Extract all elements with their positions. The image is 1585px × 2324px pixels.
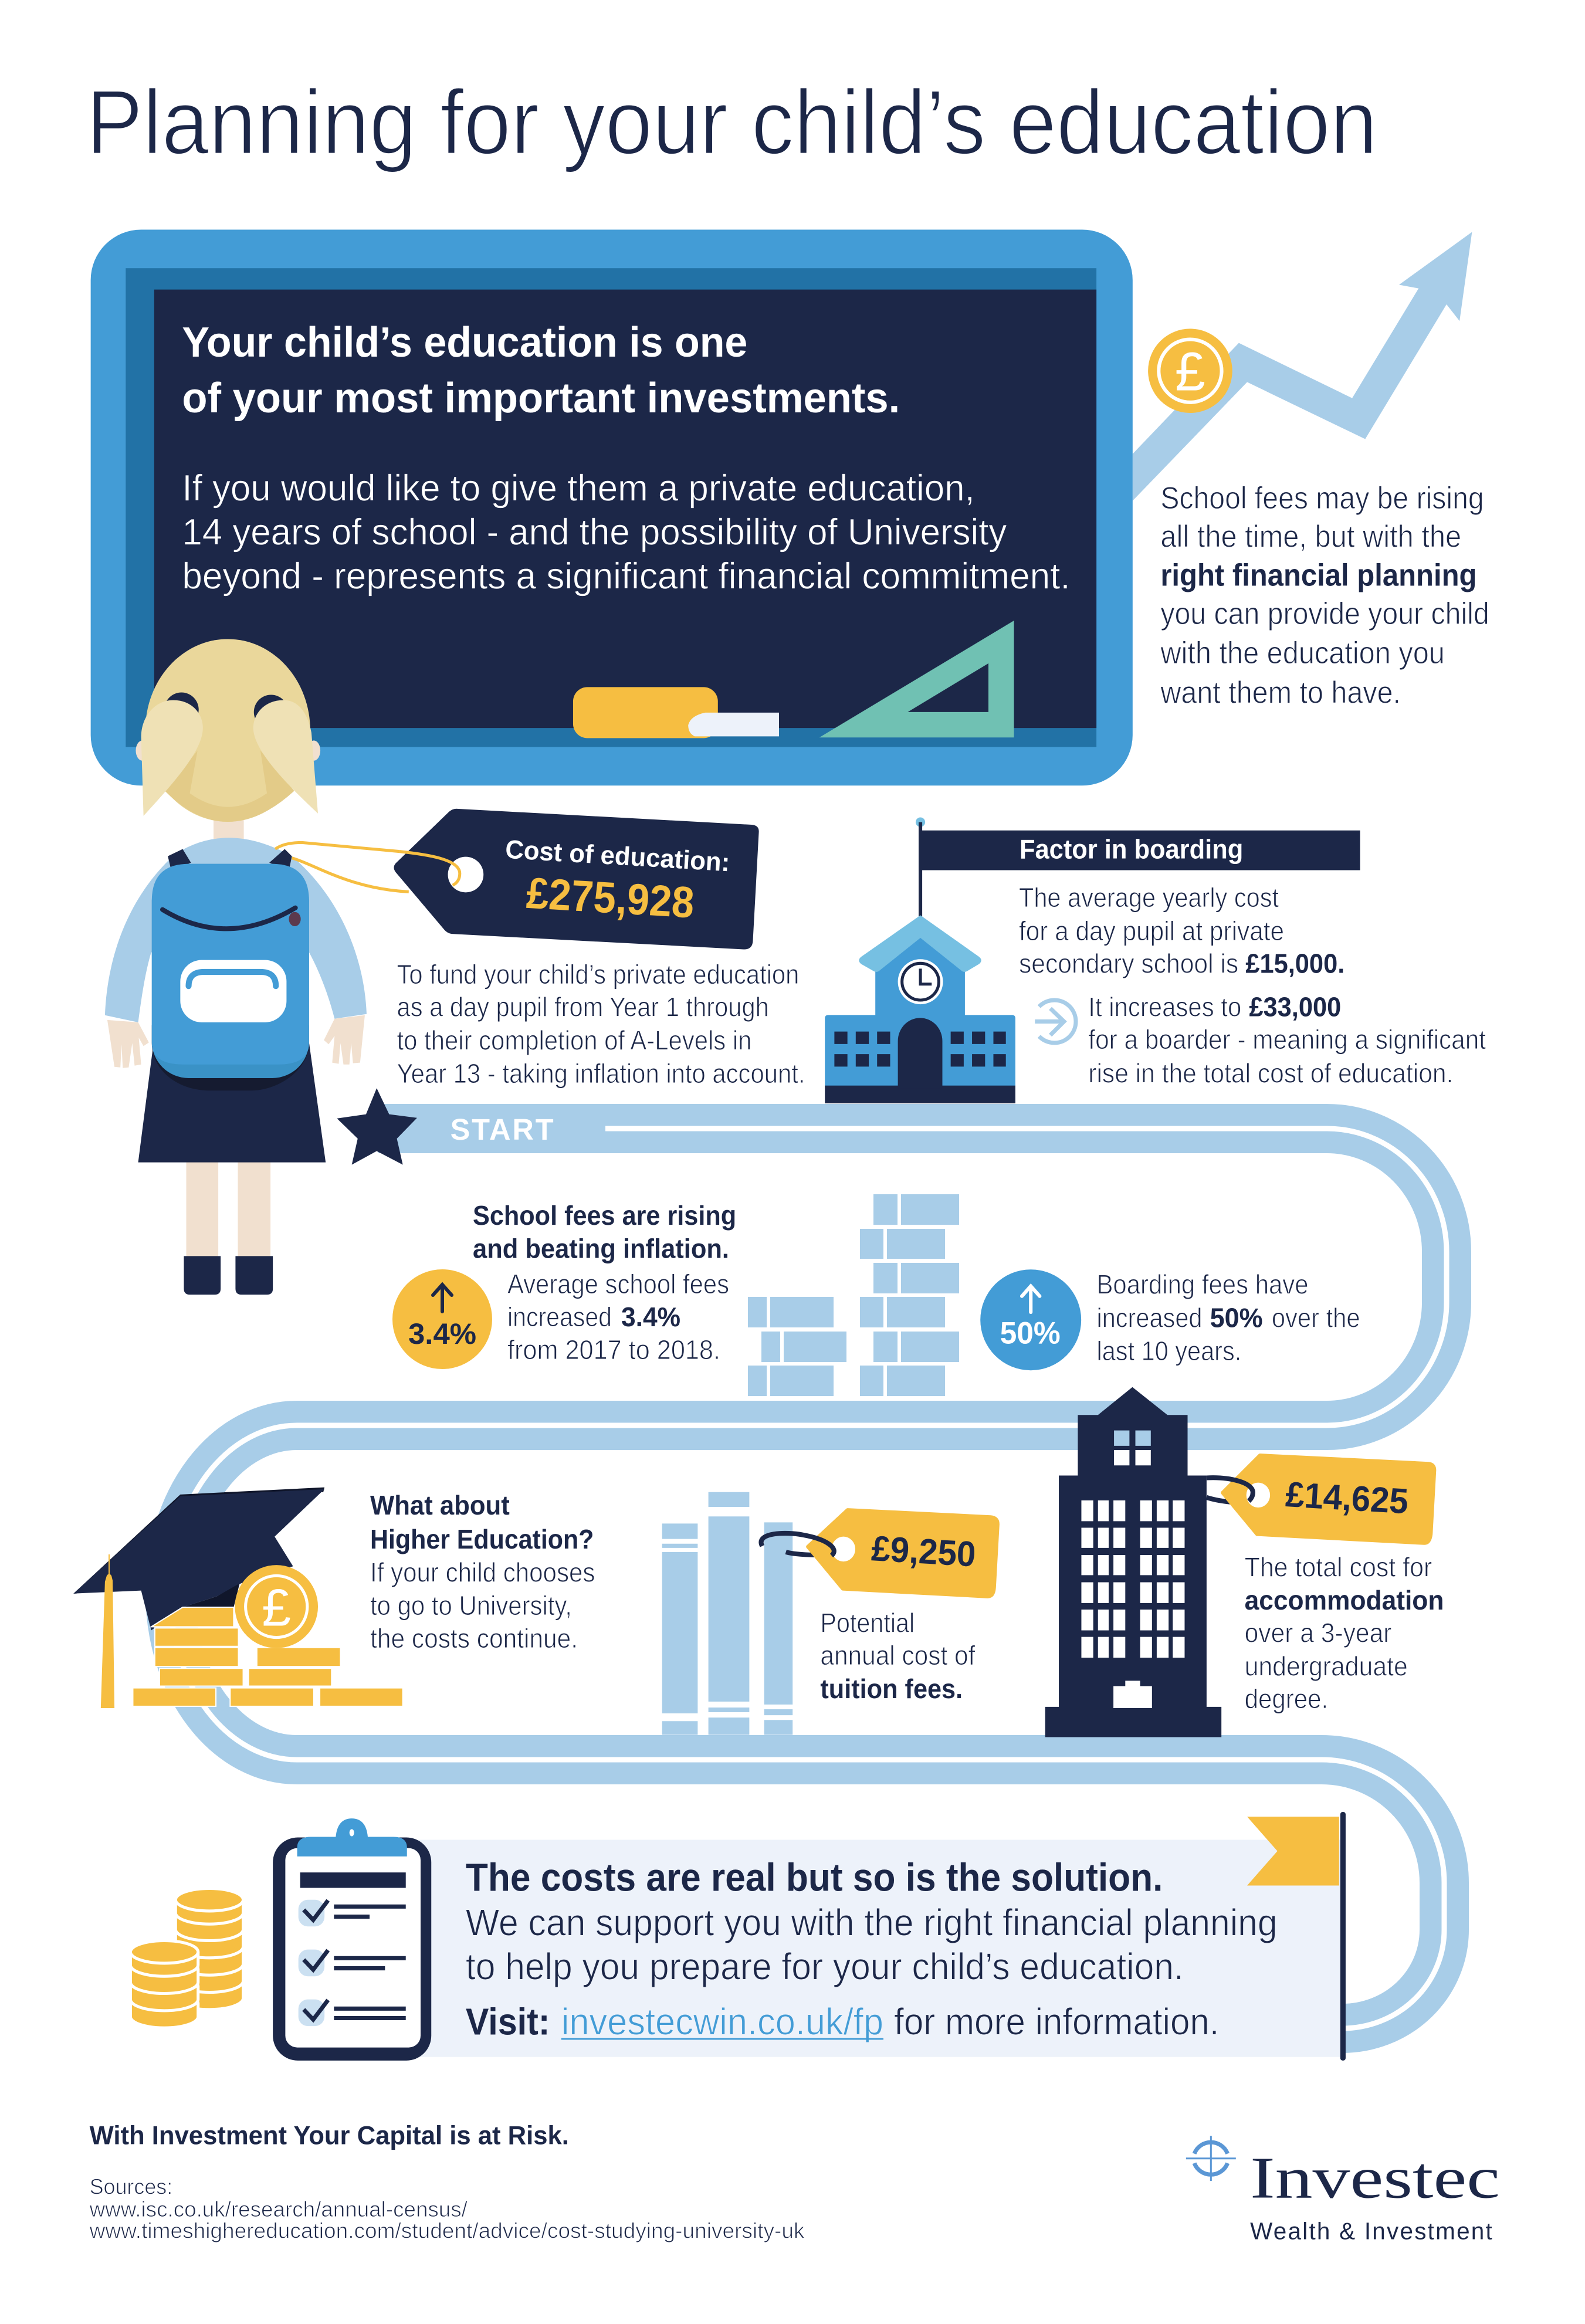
illustration: graduation cap and gold — [73, 1488, 403, 1708]
winding road — [170, 1129, 1447, 2028]
price tag: tuition fees — [761, 1510, 998, 1597]
right intro text: want them to have. — [1160, 676, 1401, 710]
price tag: accommodation: £14,625 — [1285, 1474, 1410, 1521]
board body text: beyond - represents a significant financial commitment. — [182, 555, 1071, 597]
stat: 50 percent — [980, 1269, 1081, 1370]
board body text: If you would like to give them a private education, — [182, 468, 975, 509]
sources — [89, 2174, 805, 2242]
icon: start star — [337, 1088, 417, 1165]
icon: board eraser — [573, 687, 718, 738]
text: higher education: the costs continue. — [370, 1623, 578, 1654]
text: boarding fees: Boarding fees have — [1096, 1269, 1309, 1300]
text: boarder cost: rise in the total cost of education. — [1088, 1058, 1453, 1089]
heading: school fees rising: School fees are rising — [473, 1200, 736, 1231]
icon: finish flag — [1247, 1812, 1346, 2061]
right intro text: School fees may be rising — [1160, 481, 1484, 516]
stat: 3.4 percent: 3.4% — [408, 1317, 476, 1350]
panel: call to action — [414, 1840, 1341, 2057]
panel: blackboard — [91, 229, 1133, 785]
board heading — [182, 319, 900, 422]
text: higher education: If your child chooses — [370, 1557, 595, 1588]
sources: Sources: — [90, 2174, 172, 2198]
logo: Investec: Wealth & Investment — [1250, 2217, 1492, 2244]
illustration: school building — [825, 817, 1015, 1103]
price tag: cost of education — [275, 809, 759, 950]
icon: arrow in circle — [1035, 1000, 1076, 1043]
start label: START — [451, 1113, 554, 1146]
text: accommodation: undergraduate — [1245, 1651, 1408, 1681]
text: tuition fees — [820, 1607, 975, 1704]
risk warning: With Investment Your Capital is at Risk. — [90, 2121, 569, 2150]
text: boarding day pupil cost: The average yearly cost — [1019, 882, 1279, 913]
text: tuition fees: tuition fees. — [820, 1673, 963, 1704]
call to action text — [466, 1901, 1278, 1987]
illustration: accommodation tower — [1045, 1387, 1221, 1737]
text: average school fees: from 2017 to 2018. — [507, 1334, 720, 1365]
heading: school fees rising — [473, 1200, 736, 1263]
illustration: schoolgirl — [105, 639, 367, 1295]
text: funding explanation: to their completion of A-Levels in — [397, 1025, 751, 1055]
board heading: of your most important investments. — [182, 374, 900, 422]
sources: www.timeshighereducation.com/student/advice/cost-studying-university-uk — [89, 2218, 805, 2242]
right intro text: right financial planning — [1160, 558, 1476, 592]
call to action heading: The costs are real but so is the solution. — [466, 1857, 1163, 1900]
stat: 3.4 percent — [392, 1269, 492, 1369]
stat: 50 percent: 50% — [1000, 1316, 1061, 1351]
title: Planning for your child’s education — [86, 72, 1377, 174]
pound coin on arrow — [1148, 328, 1232, 413]
text: average school fees: increased — [507, 1302, 612, 1332]
text: boarding day pupil cost: for a day pupil at private — [1019, 916, 1284, 946]
text: boarding day pupil cost: secondary school is — [1019, 948, 1238, 979]
icon: chalk — [688, 713, 779, 736]
illustration: books — [662, 1492, 792, 1734]
text: accommodation — [1245, 1551, 1444, 1714]
text: boarding fees: 50% — [1210, 1302, 1263, 1333]
text: boarding fees: increased — [1096, 1302, 1203, 1333]
price tag: cost of education: Cost of education: — [504, 835, 731, 877]
text: tuition fees: annual cost of — [820, 1640, 975, 1671]
text: boarder cost: £33,000 — [1249, 991, 1341, 1022]
icon: clipboard checklist — [273, 1818, 431, 2061]
logo: Investec — [1186, 2136, 1500, 2244]
text: boarding fees: over the — [1272, 1302, 1360, 1333]
icon: set square — [819, 621, 1014, 737]
text: boarding day pupil cost — [1019, 882, 1344, 979]
illustration: stacks of bricks — [748, 1194, 959, 1396]
text: boarding day pupil cost: £15,000. — [1245, 948, 1344, 979]
text: higher education — [370, 1490, 595, 1654]
board heading: Your child’s education is one — [182, 319, 747, 366]
text: funding explanation: Year 13 - taking inflation into account. — [397, 1058, 805, 1089]
visit link line: for more information. — [894, 2000, 1219, 2042]
text: accommodation: accommodation — [1245, 1585, 1444, 1615]
text: funding explanation: To fund your child’s private education — [397, 959, 799, 990]
price tag: accommodation — [1207, 1455, 1434, 1543]
text: boarder cost: It increases to — [1088, 991, 1241, 1022]
price tag: cost of education: £275,928 — [525, 868, 696, 927]
text: accommodation: over a 3-year — [1245, 1618, 1391, 1648]
text: boarding fees — [1096, 1269, 1360, 1366]
rising arrow — [1133, 232, 1472, 501]
right intro text — [1160, 481, 1489, 710]
banner: factor in boarding: Factor in boarding — [1020, 834, 1243, 864]
pound coin on arrow: £ — [1175, 341, 1205, 402]
right intro text: all the time, but with the — [1160, 520, 1461, 554]
text: boarder cost — [1088, 991, 1486, 1089]
icon: coin stacks — [130, 1888, 243, 2028]
text: higher education: to go to University, — [370, 1590, 572, 1621]
call to action text: to help you prepare for your child’s education. — [466, 1945, 1184, 1987]
sources: www.isc.co.uk/research/annual-census/ — [89, 2197, 468, 2221]
text: accommodation: The total cost for — [1245, 1551, 1432, 1582]
heading: school fees rising: and beating inflation. — [473, 1233, 729, 1263]
text: accommodation: degree. — [1245, 1683, 1328, 1714]
visit link line: Visit: — [466, 2000, 550, 2042]
board body text — [182, 468, 1071, 597]
illustration: graduation cap and gold: £ — [262, 1578, 291, 1637]
visit link line: investecwin.co.uk/fp — [561, 2000, 883, 2042]
text: higher education: What about — [370, 1490, 510, 1520]
banner: factor in boarding — [919, 831, 1360, 870]
text: average school fees: 3.4% — [621, 1302, 680, 1332]
text: funding explanation — [397, 959, 805, 1089]
board body text: 14 years of school - and the possibility of University — [182, 512, 1007, 553]
text: boarder cost: for a boarder - meaning a significant — [1088, 1024, 1486, 1055]
text: higher education: Higher Education? — [370, 1524, 594, 1554]
text: average school fees — [507, 1269, 729, 1365]
right intro text: with the education you — [1160, 636, 1445, 670]
call to action text: We can support you with the right financial planning — [466, 1901, 1278, 1943]
price tag: tuition fees: £9,250 — [871, 1528, 977, 1574]
text: boarding fees: last 10 years. — [1096, 1336, 1241, 1366]
text: tuition fees: Potential — [820, 1607, 915, 1638]
text: funding explanation: as a day pupil from Year 1 through — [397, 992, 769, 1022]
text: average school fees: Average school fees — [507, 1269, 729, 1299]
visit link line — [466, 2000, 1219, 2042]
right intro text: you can provide your child — [1160, 597, 1489, 631]
logo: Investec: Investec — [1250, 2145, 1500, 2210]
